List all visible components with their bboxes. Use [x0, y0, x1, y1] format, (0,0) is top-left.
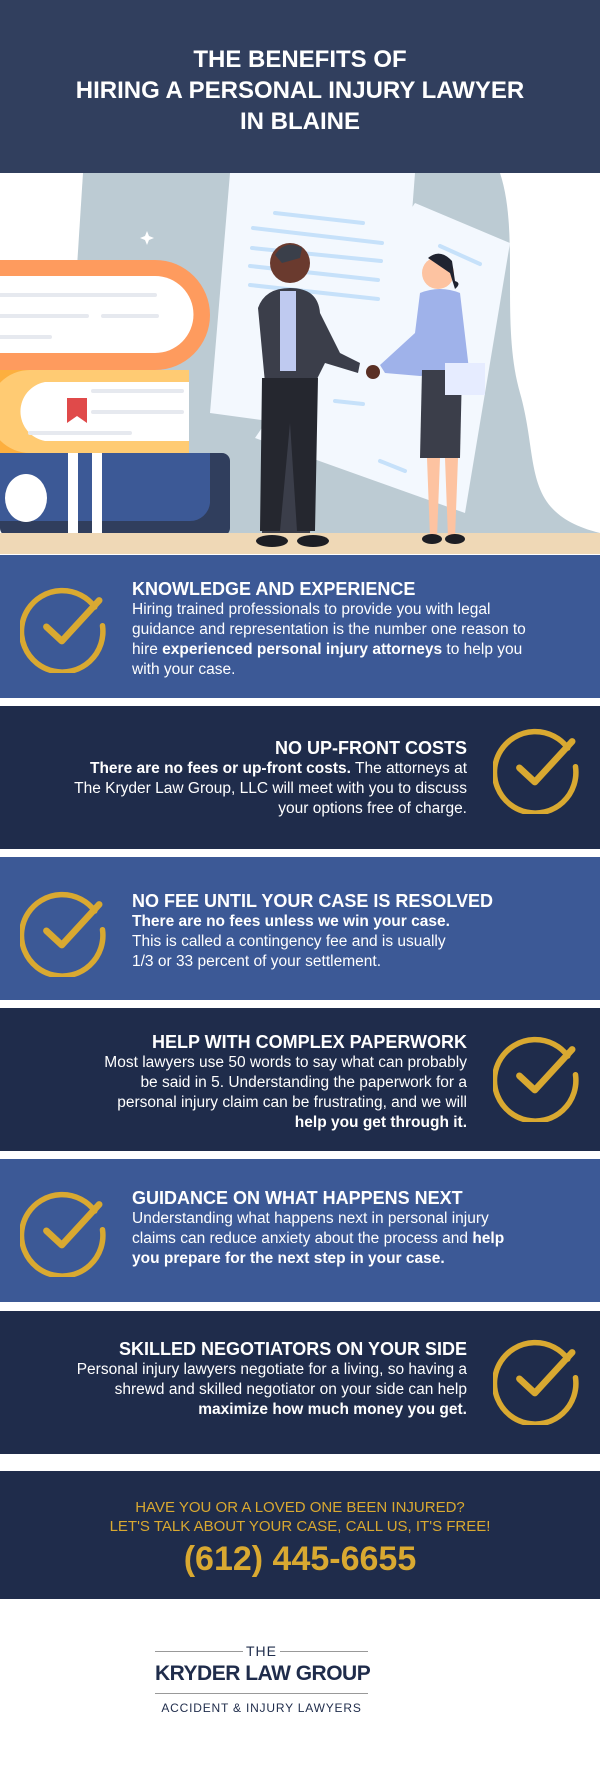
text block: Hiring trained professionals to provide you with legal — [132, 601, 490, 618]
header title: IN BLAINE — [240, 108, 360, 135]
icon: check circle — [493, 1340, 579, 1425]
man — [256, 243, 380, 547]
text block: There are no fees unless we win your case. — [132, 913, 450, 930]
cta text: HAVE YOU OR A LOVED ONE BEEN INJURED? — [135, 1499, 465, 1516]
text block: you prepare for the next step in your case. — [132, 1250, 445, 1267]
text block: Understanding what happens next in personal injury — [132, 1210, 489, 1227]
logo — [155, 1643, 370, 1715]
icon: check circle — [20, 588, 106, 673]
text block — [132, 891, 493, 970]
text block — [132, 1188, 504, 1267]
phone number: (612) 445-6655 — [184, 1540, 416, 1578]
panel: no up-front costs — [0, 706, 600, 849]
text block — [104, 1032, 467, 1131]
text block: NO FEE UNTIL YOUR CASE IS RESOLVED — [132, 891, 493, 911]
text block: KNOWLEDGE AND EXPERIENCE — [132, 579, 415, 599]
panel: guidance on what happens next — [0, 1159, 600, 1302]
text block: hire experienced personal injury attorneys to help you — [132, 641, 522, 658]
text block: NO UP-FRONT COSTS — [275, 738, 467, 758]
logo: THE — [246, 1643, 277, 1659]
cta text — [110, 1499, 490, 1535]
header title: HIRING A PERSONAL INJURY LAWYER — [76, 77, 524, 104]
panel: skilled negotiators — [0, 1311, 600, 1454]
panel: complex paperwork — [0, 1008, 600, 1151]
woman — [380, 254, 485, 544]
text block: personal injury claim can be frustrating, and we will — [117, 1094, 467, 1111]
icon: check circle — [20, 1192, 106, 1277]
text block: There are no fees or up-front costs. The attorneys at — [90, 760, 467, 777]
header title: THE BENEFITS OF — [193, 46, 407, 73]
illustration: handshake with books and documents — [0, 173, 600, 554]
text block — [77, 1339, 467, 1418]
text block: be said in 5. Understanding the paperwork for a — [140, 1074, 467, 1091]
text block: with your case. — [132, 661, 235, 678]
text block: GUIDANCE ON WHAT HAPPENS NEXT — [132, 1188, 463, 1208]
panel: no fee until resolved — [0, 857, 600, 1000]
panel: knowledge and experience — [0, 555, 600, 698]
text block: help you get through it. — [295, 1114, 467, 1131]
text block: maximize how much money you get. — [198, 1401, 467, 1418]
text block: Personal injury lawyers negotiate for a living, so having a — [77, 1361, 467, 1378]
text block — [74, 738, 467, 817]
text block: The Kryder Law Group, LLC will meet with you to discuss — [74, 780, 467, 797]
logo: KRYDER LAW GROUP — [155, 1662, 370, 1685]
header title — [0, 0, 600, 173]
icon: check circle — [493, 728, 579, 814]
text block: claims can reduce anxiety about the process and help — [132, 1230, 504, 1247]
text block: 1/3 or 33 percent of your settlement. — [132, 953, 381, 970]
text block: This is called a contingency fee and is usually — [132, 933, 446, 950]
icon: check circle — [493, 1036, 579, 1122]
text block: your options free of charge. — [278, 800, 467, 817]
text block: HELP WITH COMPLEX PAPERWORK — [152, 1032, 467, 1052]
text block: guidance and representation is the number one reason to — [132, 621, 526, 638]
text block — [132, 579, 526, 678]
icon: check circle — [20, 892, 106, 977]
logo: ACCIDENT & INJURY LAWYERS — [161, 1701, 362, 1715]
text block: SKILLED NEGOTIATORS ON YOUR SIDE — [119, 1339, 467, 1359]
text block: Most lawyers use 50 words to say what can probably — [104, 1054, 467, 1071]
cta text: LET'S TALK ABOUT YOUR CASE, CALL US, IT'S FREE! — [110, 1518, 490, 1535]
text block: shrewd and skilled negotiator on your side can help — [115, 1381, 467, 1398]
call to action — [0, 1471, 600, 1599]
